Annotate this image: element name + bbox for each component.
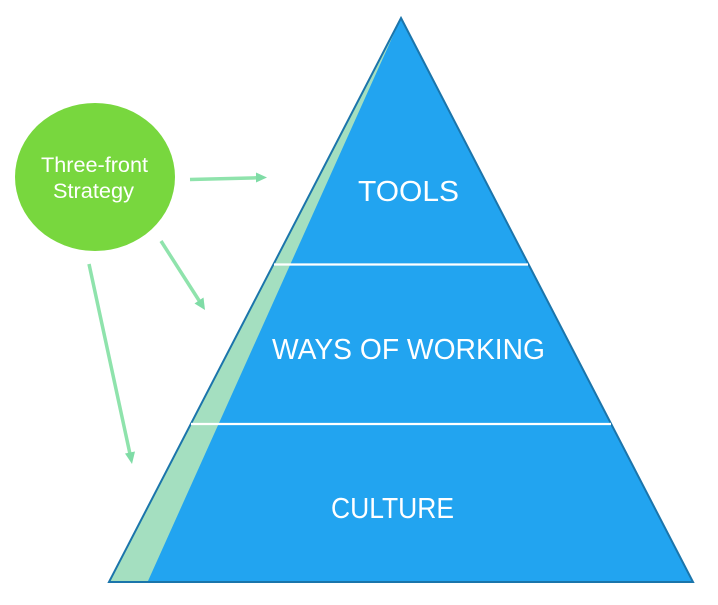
green sliver band	[110, 18, 401, 581]
pyramid fill	[109, 18, 693, 582]
pyramid outline	[109, 18, 693, 582]
arrow: to tools	[190, 172, 267, 182]
tier label: ways of working: WAYS OF WORKING	[272, 334, 545, 366]
pyramid	[109, 18, 693, 582]
tier divider: tools and ways of working	[274, 263, 528, 266]
tier label: tools: TOOLS	[358, 176, 459, 208]
tier label: culture: CULTURE	[331, 493, 454, 525]
strategy circle	[15, 103, 175, 251]
tier divider: ways of working and culture	[191, 423, 611, 425]
arrow: to culture	[89, 264, 135, 464]
circle label line 2: Strategy	[53, 180, 135, 203]
circle label line 1: Three-front	[41, 154, 148, 177]
circle shape	[15, 103, 175, 251]
arrow: to ways of working	[161, 241, 205, 310]
